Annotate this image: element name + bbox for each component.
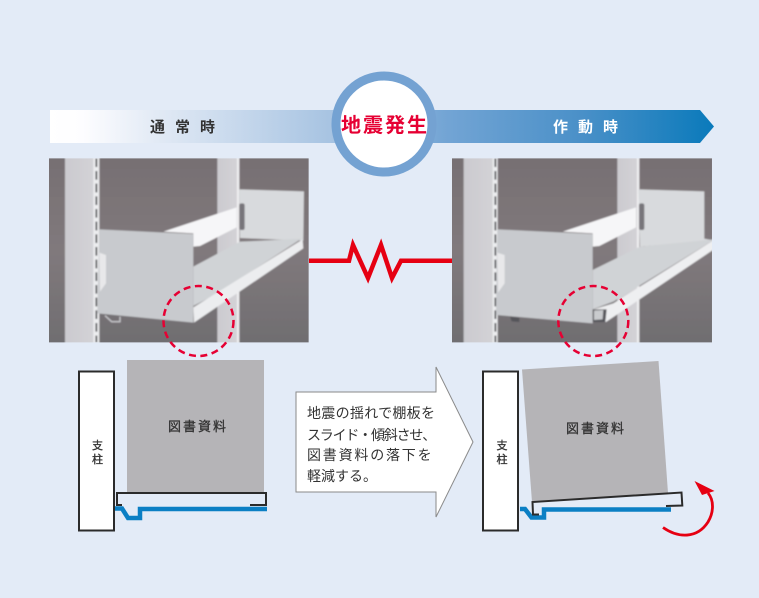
callout arrow with explanation: 軽減する。 [307, 468, 377, 484]
photo: shelf in normal state [47, 157, 312, 345]
dashed circle: activated state detail [558, 286, 628, 356]
callout arrow with explanation: スライド・傾斜させ、 [307, 427, 435, 443]
shelf board [117, 493, 266, 505]
callout arrow with explanation: 図書資料の落下を [307, 447, 433, 463]
post: 柱 [92, 452, 103, 466]
dashed circle: normal state detail [164, 286, 234, 356]
tilted books block: 図書資料 [566, 421, 626, 436]
blue rail [520, 509, 671, 518]
post [483, 372, 518, 530]
tilted books block [522, 361, 668, 502]
connector: seismic zigzag [309, 245, 452, 278]
tilted shelf board [532, 492, 682, 514]
earthquake circle badge [336, 76, 432, 172]
books block: 図書資料 [168, 419, 228, 434]
post: 支 [92, 439, 103, 452]
rotation arrow [663, 481, 714, 535]
callout arrow with explanation [296, 367, 473, 517]
blue rail [115, 508, 267, 518]
label: activated state: 作動時 [553, 119, 628, 136]
label: normal state: 通常時 [150, 119, 225, 136]
post [79, 372, 114, 530]
post: 柱 [496, 452, 508, 466]
diagram: normal state [79, 360, 267, 530]
photo: shelf in activated state [450, 157, 715, 345]
post: 支 [496, 439, 508, 452]
callout arrow with explanation: 地震の揺れで棚板を [307, 405, 435, 421]
diagram: activated state [483, 361, 682, 530]
earthquake circle badge: 地震発生 [341, 114, 429, 137]
books block [127, 360, 264, 492]
progress arrow band [50, 110, 714, 143]
